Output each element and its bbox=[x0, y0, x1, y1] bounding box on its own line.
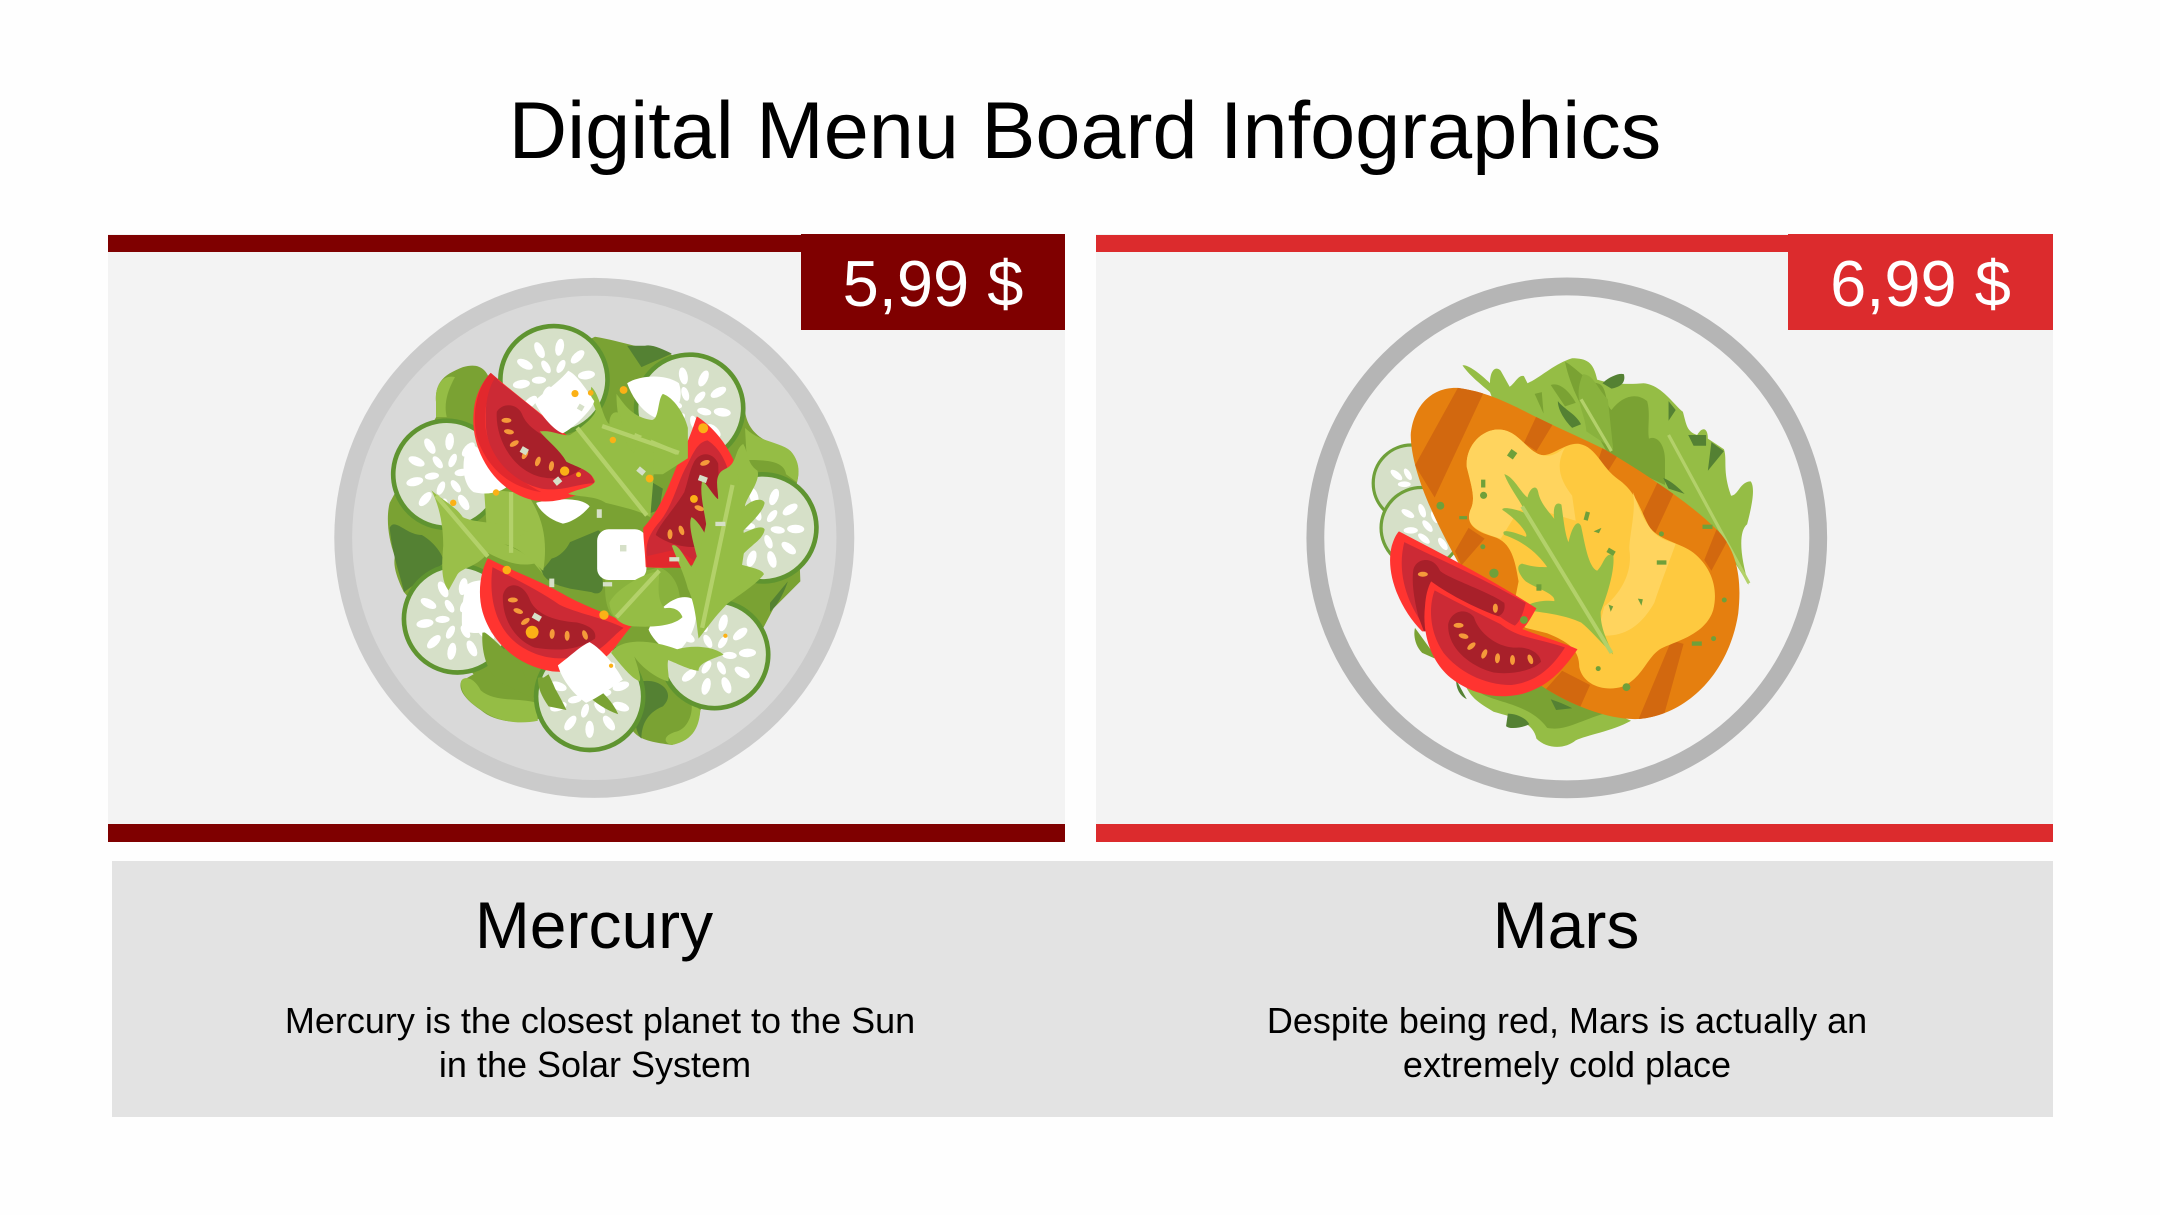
cheese cubes: front bbox=[534, 371, 623, 703]
plate ring bbox=[1315, 286, 1818, 789]
melted sauce bbox=[1467, 430, 1715, 689]
panel: Mercury card bbox=[108, 234, 1065, 842]
cucumber slices bbox=[389, 318, 832, 750]
central greens bbox=[482, 481, 680, 710]
tomato wedge: lower left bbox=[480, 558, 632, 672]
bottom bar bbox=[108, 824, 1065, 842]
lettuce base bbox=[388, 337, 800, 745]
text: Mars description: Despite being red, Mars is actually an bbox=[1267, 1000, 1867, 1041]
text: Mercury description: in the Solar System bbox=[439, 1044, 751, 1085]
tomato wedge: back bbox=[1390, 531, 1536, 631]
lettuce underlay top bbox=[1462, 358, 1753, 585]
price tag bbox=[801, 234, 1065, 330]
text: Mercury description bbox=[285, 1000, 915, 1085]
arugula leaf: right large bbox=[672, 444, 765, 639]
herb flecks bbox=[520, 404, 725, 622]
illustration: toast plate bbox=[1306, 278, 1828, 798]
text: Mars description bbox=[1267, 1000, 1867, 1085]
arugula leaf: upper centre bbox=[540, 387, 688, 517]
lettuce underlay bottom bbox=[1414, 628, 1631, 747]
grilled bread bbox=[1411, 381, 1739, 724]
arugula leaf: lower centre bbox=[543, 571, 724, 714]
panel: description strip bbox=[112, 861, 2053, 1117]
panel: Mars card bbox=[1096, 234, 2053, 842]
cucumber slices bbox=[1373, 445, 1462, 568]
price tag bbox=[1788, 234, 2053, 330]
title: Digital Menu Board Infographics bbox=[509, 86, 1661, 176]
illustration: salad plate bbox=[334, 278, 854, 798]
plate bbox=[334, 278, 854, 798]
text: Mercury description: Mercury is the closest planet to the Sun bbox=[285, 1000, 915, 1041]
heading: Mars: Mars bbox=[1493, 888, 1639, 962]
herb flecks bbox=[1436, 449, 1727, 691]
top bar bbox=[1096, 235, 2053, 252]
tomato wedge: upper left bbox=[473, 373, 602, 502]
top bar bbox=[108, 235, 1065, 252]
text: Mars description: extremely cold place bbox=[1403, 1044, 1731, 1085]
arugula leaf on sauce bbox=[1502, 474, 1614, 655]
arugula leaf: left bbox=[431, 490, 543, 590]
dressing specks bbox=[450, 386, 728, 668]
tomato wedge: upper right bbox=[643, 416, 734, 568]
price tag: 5,99 $ bbox=[843, 247, 1023, 320]
price tag: 6,99 $ bbox=[1830, 247, 2011, 320]
bottom bar bbox=[1096, 824, 2053, 842]
tomato wedge: front bbox=[1424, 581, 1578, 696]
heading: Mercury: Mercury bbox=[475, 888, 713, 962]
cheese cubes: behind bbox=[462, 377, 696, 656]
